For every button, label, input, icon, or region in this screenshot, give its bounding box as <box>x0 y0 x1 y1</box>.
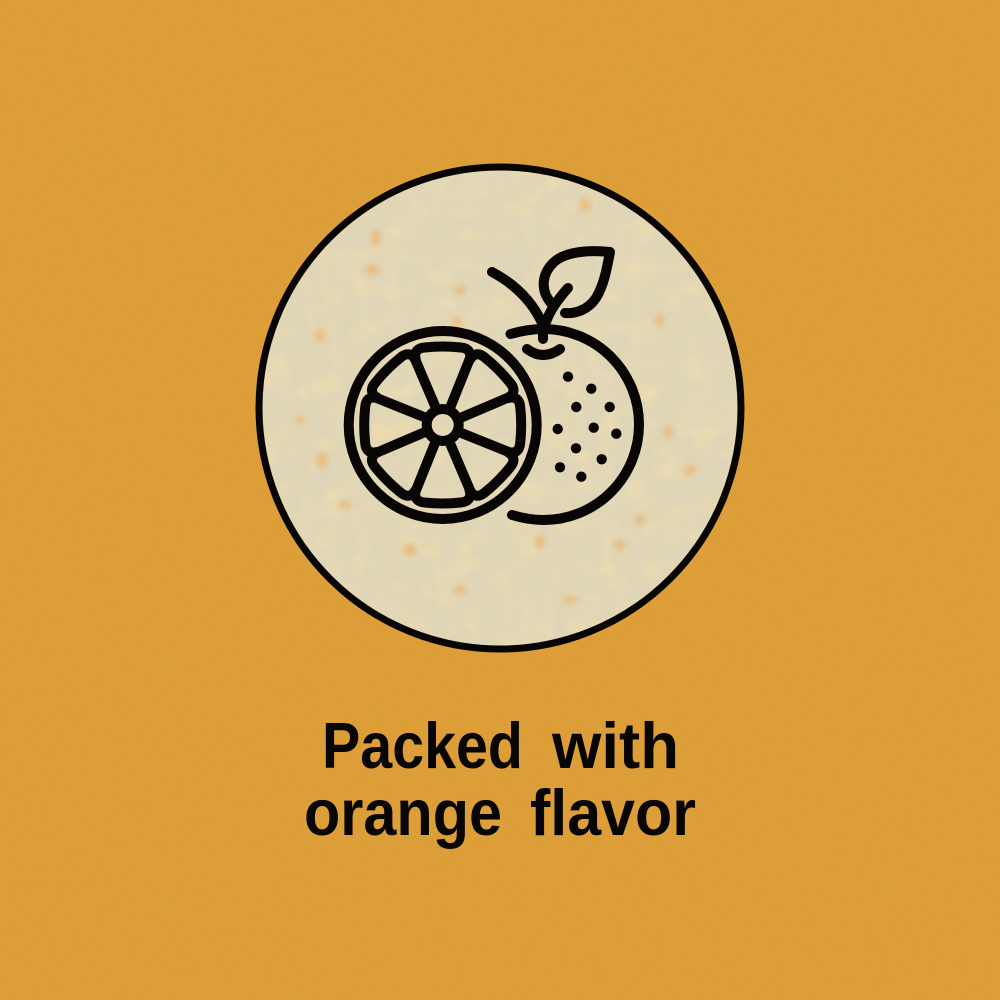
panel: textured circle <box>256 164 744 652</box>
icon: whole orange outline <box>510 329 639 520</box>
title: with <box>551 709 679 782</box>
title <box>304 709 696 849</box>
icon: peel dots <box>552 372 622 482</box>
icon: orange with slice <box>349 251 639 520</box>
title: orange <box>304 776 502 849</box>
icon: leaf <box>544 251 610 322</box>
title: Packed <box>322 709 523 782</box>
icon: calyx <box>527 349 560 355</box>
title: flavor <box>530 776 696 849</box>
icon: orange slice <box>349 331 537 519</box>
icon: stem and branch <box>492 272 543 339</box>
